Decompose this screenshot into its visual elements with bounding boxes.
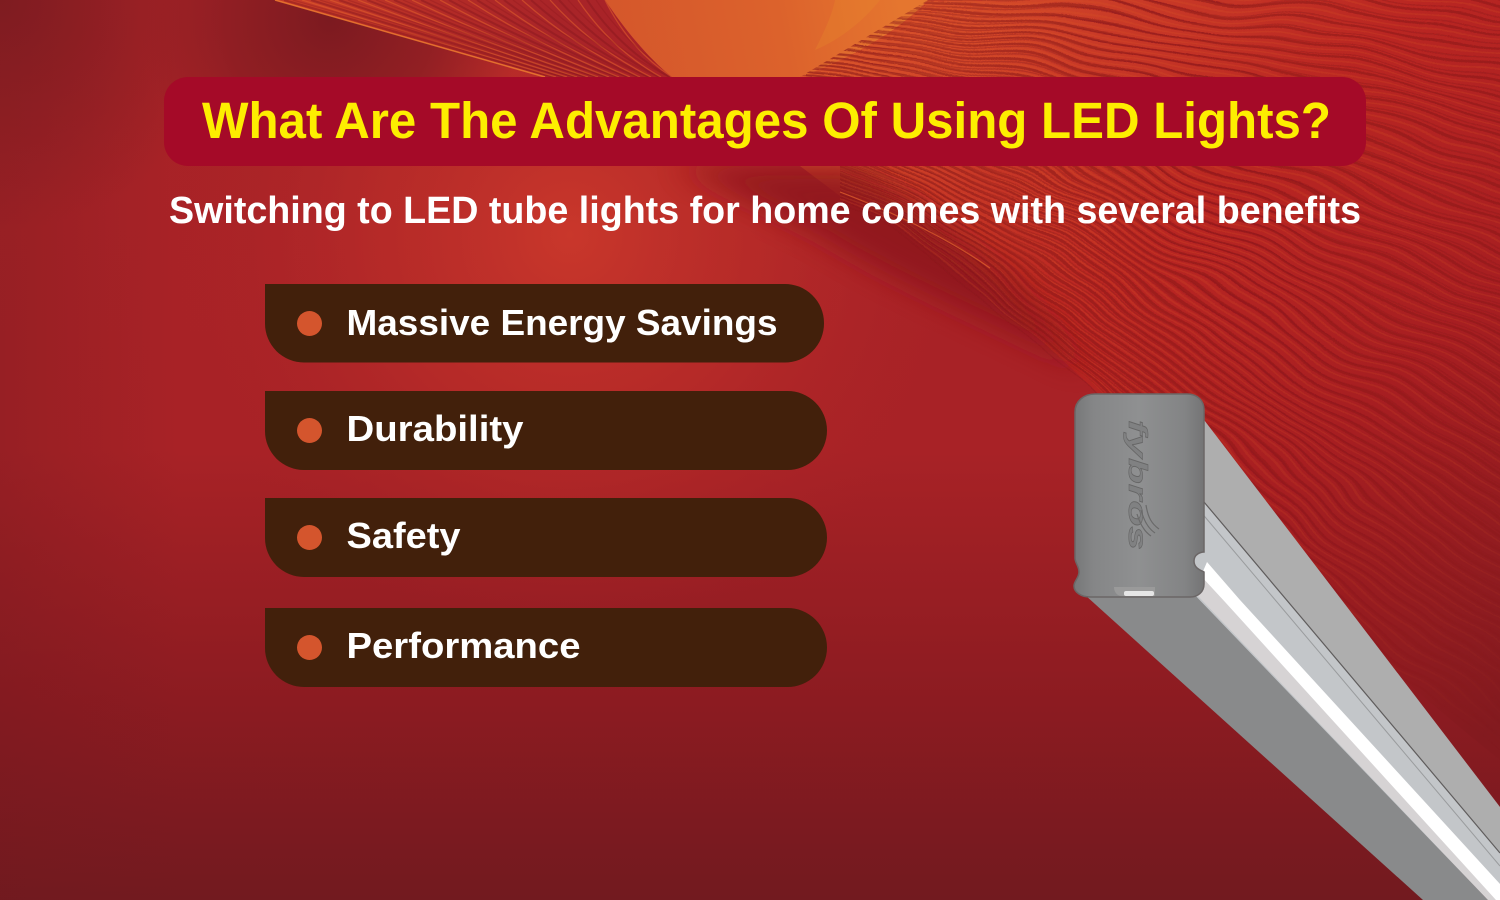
bullet dot	[297, 635, 322, 660]
cap logo	[1123, 420, 1159, 550]
benefit: performance	[265, 608, 827, 687]
lower trim	[1197, 578, 1497, 900]
subtitle: Switching to LED tube lights for home comes with several benefits	[169, 190, 1361, 232]
title banner	[164, 77, 1366, 166]
benefit: massive energy savings	[265, 284, 824, 363]
bullet dot	[297, 311, 322, 336]
bullet dot	[297, 418, 322, 443]
benefit: durability	[265, 391, 827, 470]
tube top face	[1198, 412, 1500, 853]
LED tube light	[1074, 394, 1500, 900]
cap slot	[1114, 587, 1155, 596]
cap logo: fybros	[1123, 420, 1153, 550]
bullet dot	[297, 525, 322, 550]
light strip	[1201, 562, 1500, 900]
label: Performance	[346, 625, 580, 666]
end cap	[1074, 394, 1204, 597]
title text: What Are The Advantages Of Using LED Lights?	[202, 92, 1331, 149]
label: Safety	[346, 515, 460, 556]
tube underside	[1085, 595, 1488, 900]
label: Durability	[346, 408, 524, 449]
benefit: safety	[265, 498, 827, 577]
label: Massive Energy Savings	[346, 302, 778, 343]
diffuser panel	[1190, 495, 1500, 900]
